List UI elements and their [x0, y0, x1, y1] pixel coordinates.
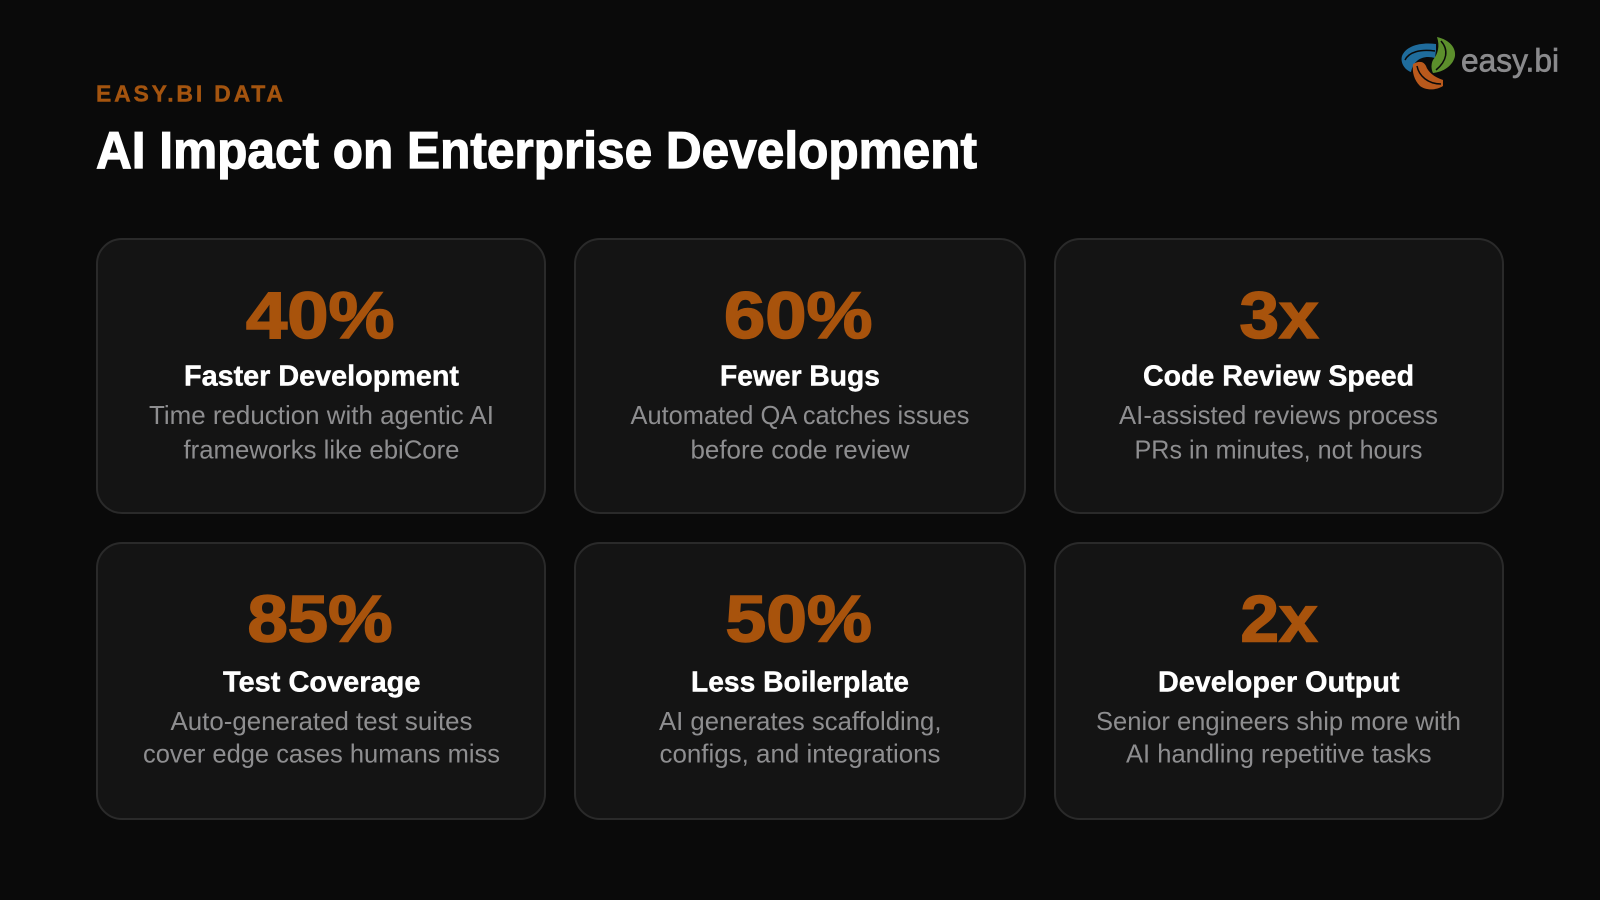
description: frameworks like ebiCore: [184, 434, 460, 464]
card heading: Less Boilerplate: [691, 667, 909, 699]
stat: 40%: 40%: [246, 278, 394, 352]
title: AI Impact on Enterprise Development: [96, 122, 977, 180]
description: cover edge cases humans miss: [143, 738, 500, 768]
card heading: Code Review Speed: [1143, 361, 1414, 393]
description: [1119, 400, 1438, 464]
description: PRs in minutes, not hours: [1134, 434, 1422, 464]
stat: 3x: 3x: [1240, 278, 1319, 352]
description: [143, 706, 500, 768]
description: Time reduction with agentic AI: [149, 400, 494, 430]
panel: fewer bugs: [575, 239, 1025, 513]
description: Auto-generated test suites: [170, 706, 472, 736]
logo: easy.bi: [1402, 37, 1559, 89]
icon: blue swoosh: [1402, 44, 1436, 72]
description: before code review: [690, 434, 910, 464]
icon: green swoosh: [1432, 37, 1455, 73]
stat: 60%: 60%: [724, 278, 872, 352]
panel: less boilerplate: [575, 543, 1025, 819]
card heading: Developer Output: [1158, 667, 1400, 699]
panel: faster development: [97, 239, 545, 513]
card heading: Fewer Bugs: [720, 361, 880, 393]
description: [1096, 706, 1461, 768]
panel: test coverage: [97, 543, 545, 819]
card heading: Faster Development: [184, 361, 459, 393]
stat: 85%: 85%: [248, 582, 392, 656]
panel: developer output: [1055, 543, 1503, 819]
description: configs, and integrations: [660, 738, 940, 768]
eyebrow: EASY.BI DATA: [96, 81, 283, 107]
stat: 2x: 2x: [1240, 582, 1318, 656]
description: AI handling repetitive tasks: [1126, 738, 1432, 768]
description: Senior engineers ship more with: [1096, 706, 1461, 736]
description: [149, 400, 494, 464]
panel: code review speed: [1055, 239, 1503, 513]
icon: orange swoosh: [1413, 62, 1443, 89]
description: AI-assisted reviews process: [1119, 400, 1438, 430]
description: AI generates scaffolding,: [659, 706, 942, 736]
card heading: Test Coverage: [223, 667, 420, 699]
logo wordmark: easy.bi: [1461, 42, 1559, 78]
stat: 50%: 50%: [726, 582, 872, 656]
description: Automated QA catches issues: [630, 400, 970, 430]
description: [630, 400, 970, 464]
description: [659, 706, 942, 768]
